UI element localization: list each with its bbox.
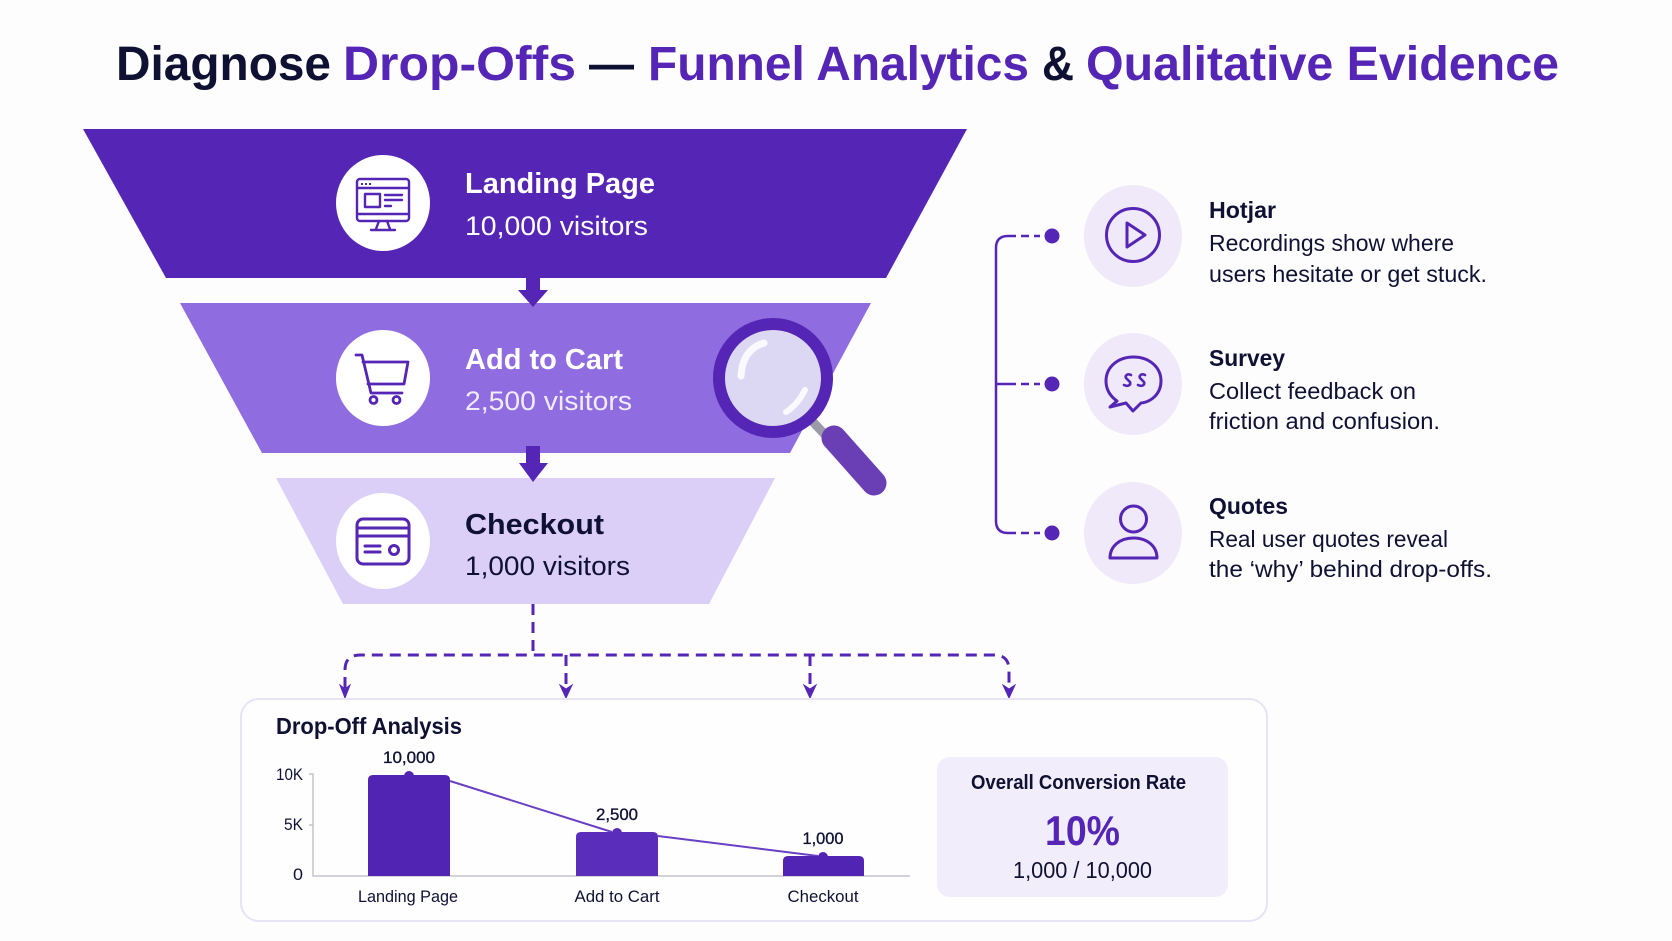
value: 2,500 visitors: 2,500 visitors [465, 386, 632, 416]
title: & [1042, 38, 1074, 91]
funnel stage: Checkout [276, 478, 775, 604]
title [116, 38, 1559, 91]
bar chart: 10,000 [383, 748, 435, 767]
heading: quotes: Quotes [1209, 493, 1288, 519]
bar chart: 5K [284, 815, 304, 834]
icon: speech bubble [1084, 333, 1182, 435]
text: hotjar description: users hesitate or get stuck. [1209, 261, 1487, 287]
title: Qualitative Evidence [1086, 38, 1559, 91]
arrow: landing page to add to cart [518, 278, 548, 307]
bar chart: Landing Page [358, 887, 458, 906]
funnel shape: checkout [276, 478, 775, 604]
title: Drop-Offs [343, 38, 576, 91]
value: 1,000 visitors: 1,000 visitors [465, 551, 630, 581]
heading: drop-off analysis: Drop-Off Analysis [276, 713, 462, 739]
evidence: Hotjar [1084, 185, 1487, 287]
icon: cart [336, 330, 430, 426]
bar chart: 0 [293, 865, 303, 884]
icon: play button [1084, 185, 1182, 287]
callout: overall conversion rate: 1,000 / 10,000 [1013, 857, 1152, 883]
icon: credit card [336, 493, 430, 589]
panel: drop-off analysis [241, 699, 1267, 921]
funnel shape: landing page [83, 129, 967, 278]
bar chart: Checkout [788, 887, 859, 906]
bar chart [276, 748, 910, 906]
label: add to cart: Add to Cart [465, 344, 623, 376]
heading: survey: Survey [1209, 345, 1285, 371]
bar chart: 1,000 [802, 829, 844, 848]
label: landing page: Landing Page [465, 168, 655, 200]
funnel shape: add to cart [180, 303, 871, 453]
title: — [589, 38, 634, 91]
icon: person [1084, 482, 1182, 584]
icon: monitor [336, 155, 430, 251]
funnel stage: Add to Cart [180, 303, 871, 453]
evidence: Survey [1084, 333, 1440, 435]
text: quotes description: Real user quotes reveal [1209, 526, 1448, 552]
text: survey description: friction and confusion. [1209, 408, 1440, 434]
text: survey description: Collect feedback on [1209, 378, 1416, 404]
bar chart: 10K [276, 765, 304, 784]
connector: funnel to analysis [340, 604, 1015, 698]
label: checkout: Checkout [465, 509, 604, 541]
evidence: Quotes [1084, 482, 1492, 584]
text: quotes description: the ‘why’ behind drop-offs. [1209, 556, 1492, 582]
title: Funnel Analytics [648, 38, 1029, 91]
callout: overall conversion rate: 10% [1045, 807, 1120, 854]
icon: magnifying glass [719, 324, 874, 483]
heading: hotjar: Hotjar [1209, 197, 1276, 223]
text: survey description [1209, 378, 1440, 434]
title: Diagnose [116, 38, 331, 91]
bar chart: Add to Cart [574, 887, 660, 906]
text: hotjar description: Recordings show where [1209, 230, 1454, 256]
funnel stage: Landing Page [83, 129, 967, 278]
text: quotes description [1209, 526, 1492, 582]
text: hotjar description [1209, 230, 1487, 287]
connector: evidence bracket [996, 228, 1060, 540]
callout: overall conversion rate [937, 757, 1228, 897]
bar chart: 2,500 [596, 805, 638, 824]
value: 10,000 visitors: 10,000 visitors [465, 211, 648, 241]
callout: overall conversion rate: Overall Conversion Rate [971, 772, 1186, 794]
arrow: add to cart to checkout [519, 446, 548, 482]
